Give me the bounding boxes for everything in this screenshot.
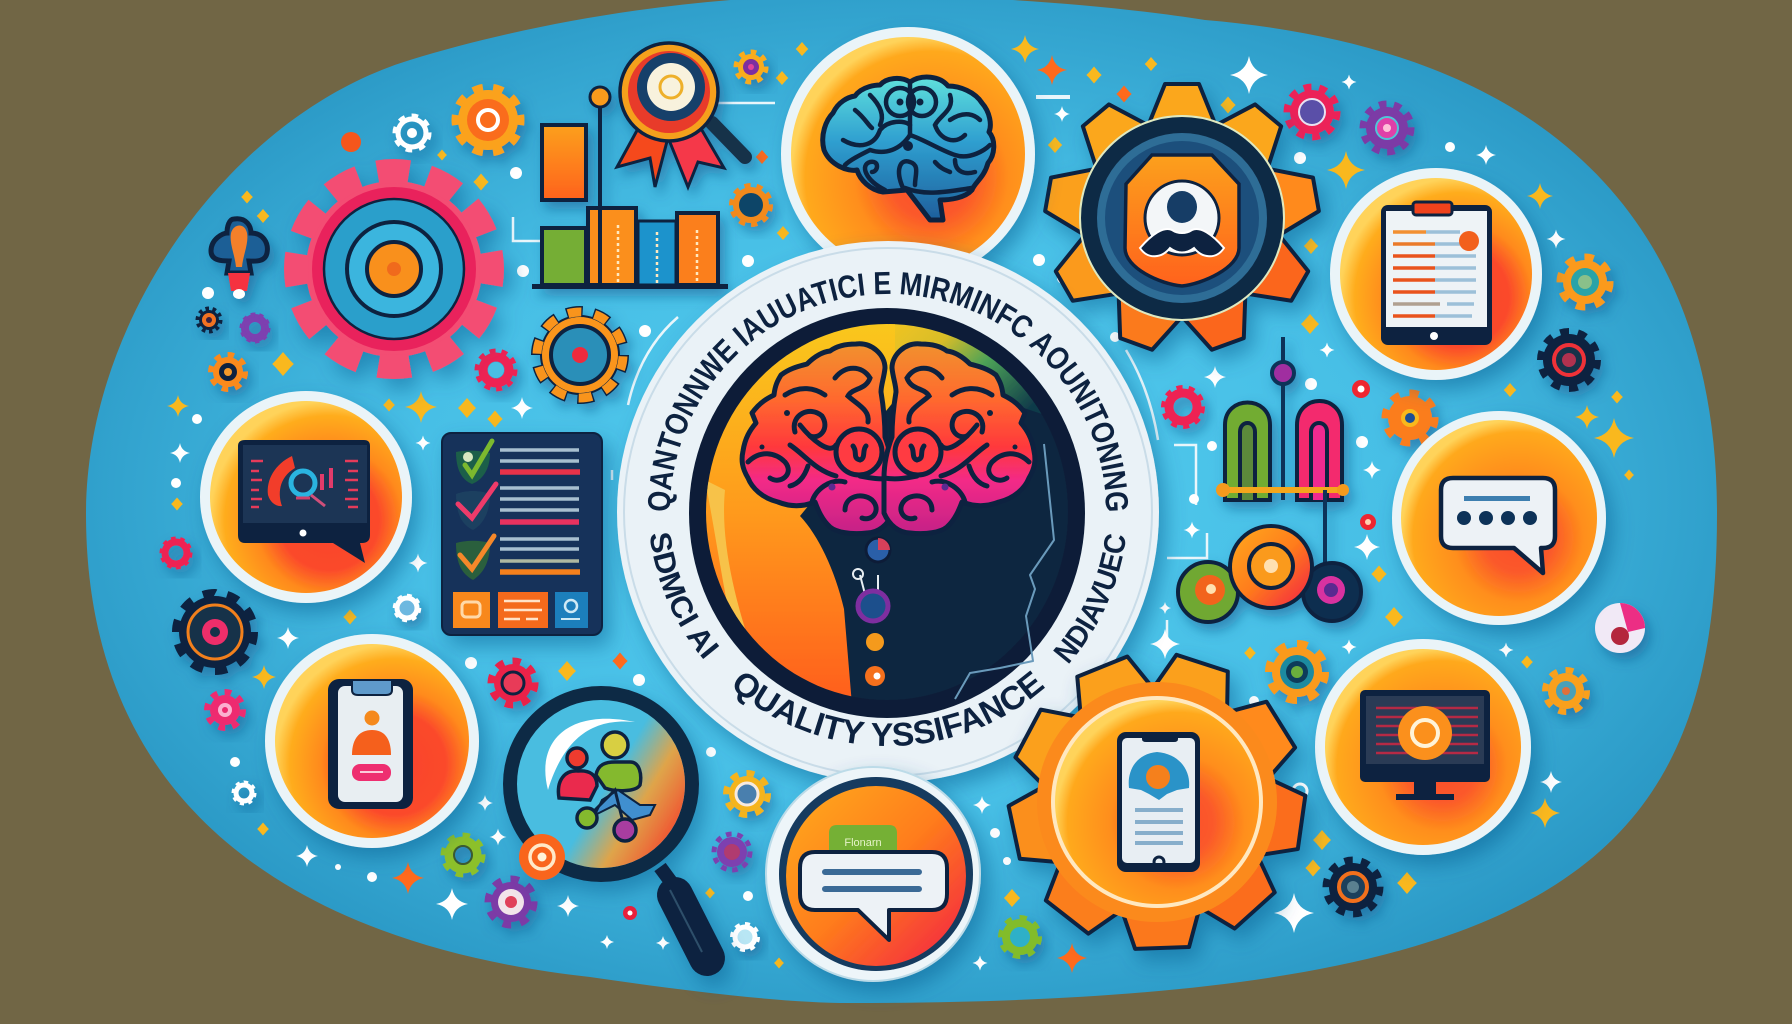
icon: pink hollow gear far left [162, 539, 190, 567]
icon: white small gear [233, 782, 255, 804]
icon: pink gear lower [491, 661, 535, 705]
icon: purple target gear [488, 879, 534, 925]
chart line top [1272, 337, 1294, 500]
icon: orange gear above chat bubble [1385, 393, 1435, 443]
icon: phone [1117, 732, 1200, 872]
tile orange [453, 592, 490, 628]
icon: top gear [736, 52, 766, 82]
icon: pink hollow gear left [478, 352, 514, 388]
icon: purple gear [242, 315, 268, 341]
icon: orange green gear [1269, 644, 1325, 700]
check row 2 [456, 484, 579, 530]
chart line lower [1323, 490, 1327, 590]
neck nodes [853, 538, 890, 686]
brain right lobe [884, 344, 1035, 534]
icon: speech bubble with dots [1441, 478, 1555, 573]
icon: target badge [519, 834, 565, 880]
bar chart with award [532, 43, 745, 289]
panel: left monitor bubble [200, 391, 412, 603]
bar: green [542, 228, 586, 285]
icon: navy gear with red ring [1541, 332, 1597, 388]
panel: right chart with arches [1178, 337, 1361, 622]
green arch [1225, 402, 1270, 500]
icon: pink hollow gear right [1164, 388, 1202, 426]
icon: small orange gear [457, 89, 519, 151]
connector lines [513, 97, 1207, 650]
shield [1125, 155, 1239, 286]
icon: purple gear top right [1363, 104, 1411, 152]
bar: tall orange [542, 125, 586, 200]
icon: navy mini gear [198, 309, 220, 331]
icon: speech bubble [800, 852, 947, 940]
head disc [689, 308, 1085, 718]
bar: orange 2 [588, 208, 636, 285]
check row 1 [456, 441, 580, 484]
white dots [171, 142, 1455, 901]
icon: large navy gear [177, 594, 253, 670]
gear teeth [1042, 84, 1322, 356]
gear teeth [1006, 651, 1307, 949]
panel: person gear [1042, 84, 1322, 356]
tab label: Flonarn [844, 837, 882, 849]
icon: orange hollow gear [732, 186, 770, 224]
orange node [1230, 526, 1312, 608]
icon: red dots [623, 380, 1376, 920]
speech lines [825, 872, 919, 889]
panel: phone bubble [265, 634, 479, 848]
panel: large orange gear with phone [1006, 651, 1307, 949]
icon: green gear bottom [1001, 918, 1039, 956]
orange cross bar [1216, 483, 1349, 497]
icon: white ring gear [394, 596, 420, 620]
icon: blue brain [823, 77, 994, 220]
icon: blue ring [1293, 784, 1307, 798]
panel: tablet bubble [1330, 168, 1542, 380]
icon: white gear bottom [732, 924, 758, 950]
icon: monitor speech [238, 440, 370, 563]
icon: rocket [211, 219, 267, 299]
icon: white gear [395, 116, 429, 150]
icon: orange teal gear [1560, 257, 1610, 307]
heading: curved text left: SDMCI AI [650, 533, 720, 659]
icon: pink white disc [1595, 603, 1645, 653]
green node [1178, 562, 1238, 622]
panel: brain bubble [781, 27, 1035, 281]
pink arch [1297, 401, 1342, 500]
panel: checklist [442, 433, 602, 635]
icon: navy gear lower right [1326, 860, 1380, 914]
icon: large pink gear [296, 171, 492, 367]
icon: purple gear beside badge [714, 834, 750, 870]
sparkles [167, 35, 1634, 973]
icon: orange gear right edge [1545, 670, 1587, 712]
panel: central badge [616, 237, 1177, 796]
bar: orange 3 [677, 213, 718, 285]
people icon [558, 732, 655, 841]
icon: person [1140, 181, 1224, 256]
icon: yellow gear beside badge [726, 773, 768, 815]
icon: pink brain [742, 344, 1035, 534]
gear dark ring [1080, 116, 1284, 320]
icon: orange dot [341, 132, 361, 152]
heading: curved badge text top: QANTONNWE IAUUATICI E MIRMINFC AOUNITONING [648, 272, 1128, 511]
icon: orange gear with navy core [211, 355, 245, 389]
icon: green gear [444, 836, 482, 874]
chart pin [590, 87, 610, 284]
brain left lobe [742, 344, 893, 534]
check row 3 [456, 536, 580, 580]
panel: monitor bubble lower right [1315, 639, 1531, 855]
icon: pink gear left edge [207, 692, 243, 728]
navy node [1303, 563, 1361, 621]
icon: magnifier [510, 693, 707, 958]
heading: curved text right: NDIAVUEC [1053, 534, 1126, 664]
tile text [498, 592, 548, 628]
heading: curved text bottom: QUALITY YSSIFANCE [734, 670, 1045, 746]
icon: desktop monitor [1360, 690, 1490, 800]
icon: pink gear top right [1287, 87, 1337, 137]
bar dashes [618, 225, 697, 283]
icon: award ribbon [617, 43, 745, 187]
chart baseline [532, 284, 728, 289]
tile blue [555, 592, 588, 628]
panel: right chat bubble [1392, 411, 1606, 625]
icon: phone [328, 679, 413, 809]
tab label [829, 825, 897, 853]
bar: blue [638, 221, 676, 285]
icon: orange gear with red ball [537, 312, 623, 398]
panel: bottom chat bubble [766, 767, 980, 981]
icon: tablet [1381, 202, 1492, 345]
